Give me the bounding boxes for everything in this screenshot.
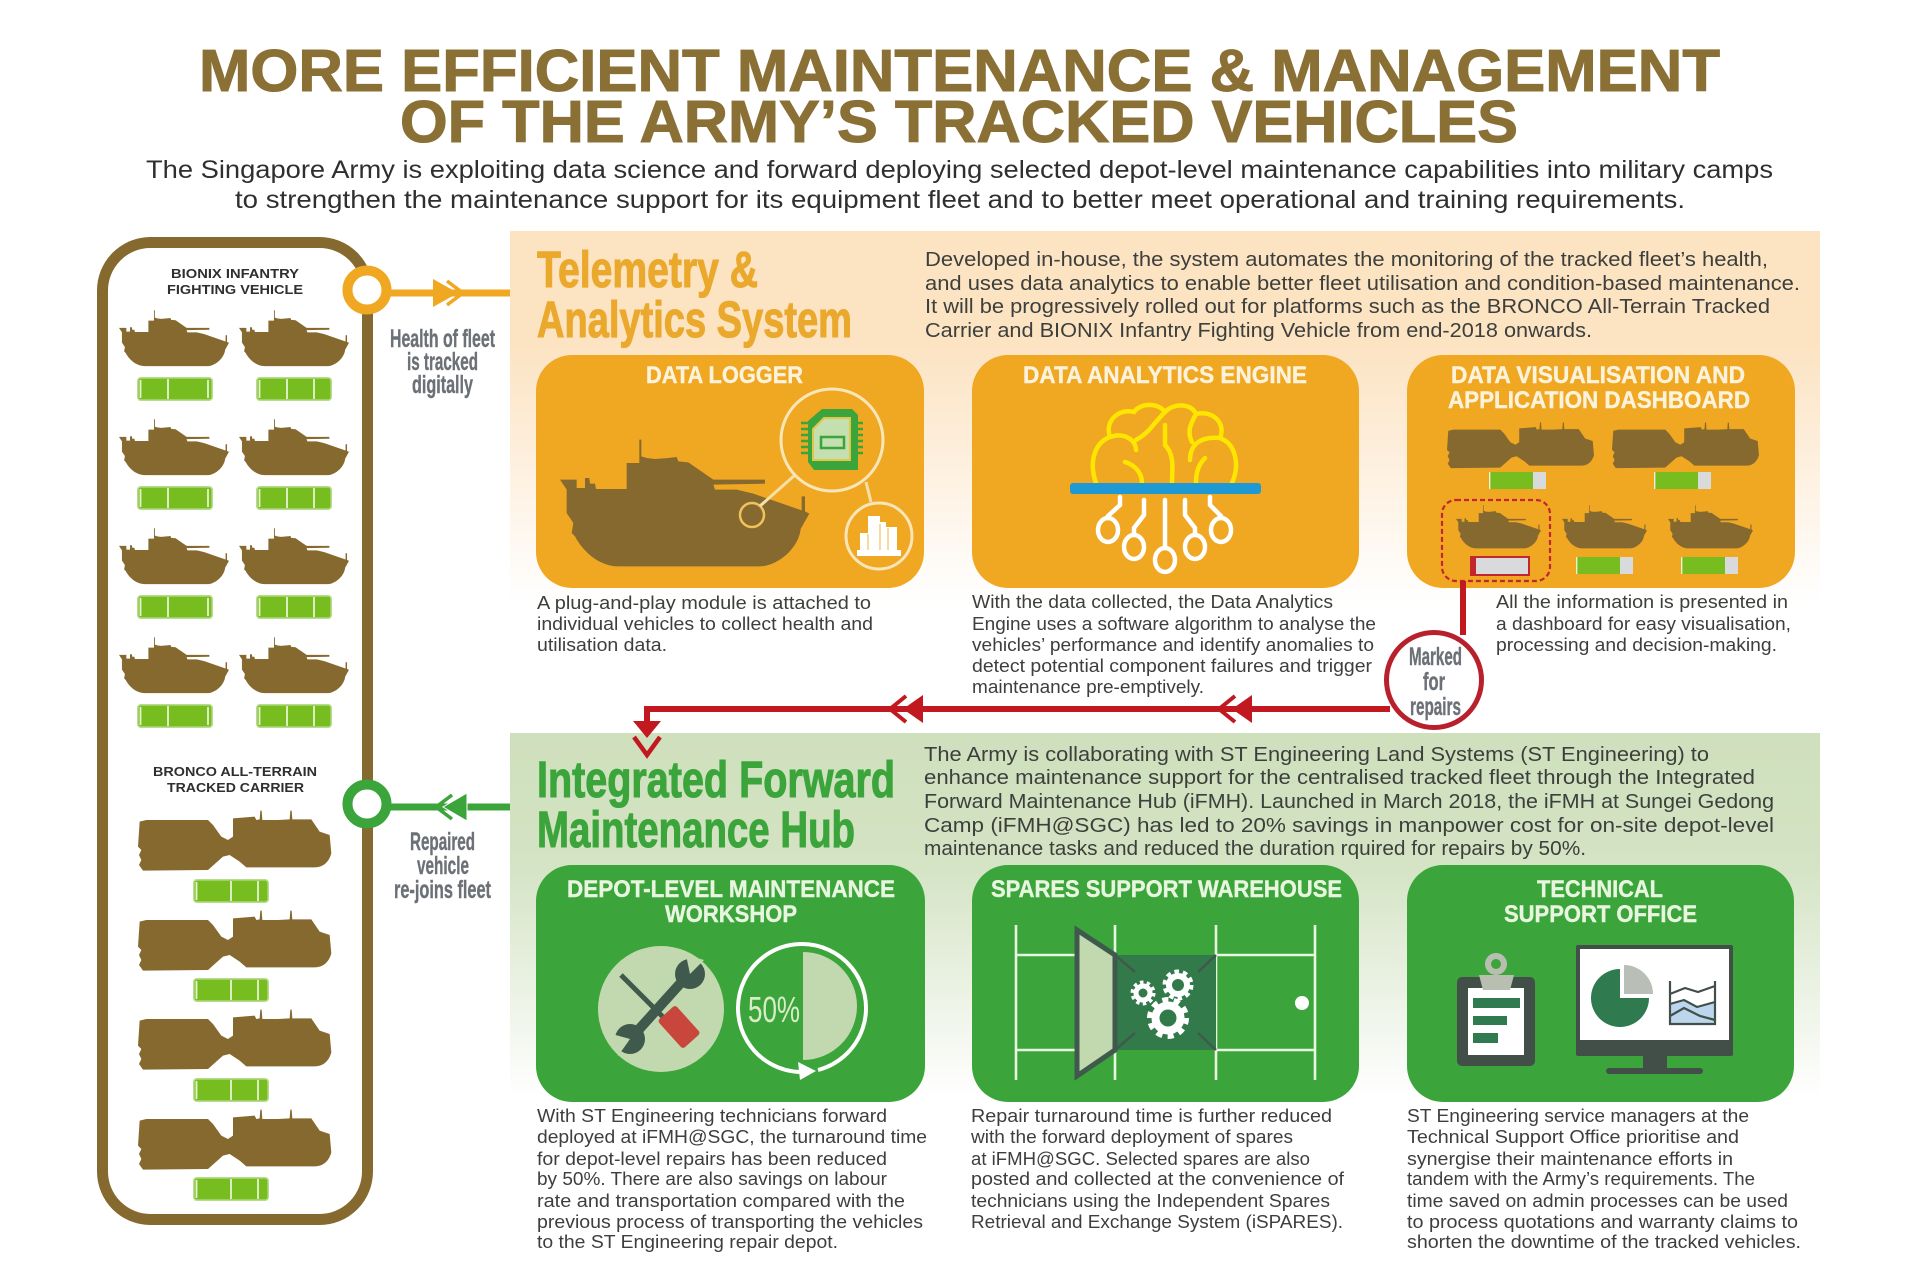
caption: technical support office: Technical Support Office prioritise and — [1407, 1127, 1739, 1147]
caption: workshop: to the ST Engineering repair depot. — [537, 1232, 838, 1252]
telemetry description: It will be progressively rolled out for platforms such as the BRONCO All-Terrain Tracked — [925, 296, 1770, 318]
panel: integrated forward maintenance hub — [510, 733, 1820, 1102]
card: spares support warehouse: SPARES SUPPORT WAREHOUSE — [991, 876, 1342, 903]
caption: data analytics engine: vehicles’ performance and identify anomalies to — [972, 635, 1374, 655]
vehicle: bionix 8 — [239, 637, 349, 727]
heading: integrated forward maintenance hub — [537, 751, 895, 858]
vehicle: bronco 3 — [138, 1010, 331, 1101]
heading: telemetry: Analytics System — [537, 291, 852, 348]
vehicle: bronco 1 — [138, 811, 331, 902]
title: MORE EFFICIENT MAINTENANCE & MANAGEMENT — [199, 38, 1720, 104]
label: bronco — [153, 764, 317, 795]
callout: marked for repairs — [1386, 632, 1482, 728]
card: technical support office — [1407, 865, 1794, 1102]
hub description: maintenance tasks and reduced the duration rquired for repairs by 50%. — [924, 838, 1586, 860]
caption: warehouse: with the forward deployment of spares — [970, 1127, 1293, 1147]
label: bionix: FIGHTING VEHICLE — [167, 282, 303, 297]
icon: dashboard vehicle 2 — [1612, 423, 1759, 489]
hub description: enhance maintenance support for the centralised tracked fleet through the Integrated — [924, 767, 1755, 789]
caption: data analytics engine: With the data collected, the Data Analytics — [972, 592, 1333, 612]
caption: technical support office: to process quotations and warranty claims to — [1407, 1212, 1798, 1232]
title: OF THE ARMY’S TRACKED VEHICLES — [400, 89, 1518, 155]
heading: integrated forward maintenance hub: Integrated Forward — [537, 751, 895, 808]
hub description — [924, 744, 1774, 860]
card: data visualisation and application dashboard: APPLICATION DASHBOARD — [1448, 387, 1750, 414]
arrow: repaired vehicle returns — [348, 784, 510, 824]
icon: clipboard — [1457, 956, 1535, 1066]
caption: technical support office: shorten the downtime of the tracked vehicles. — [1407, 1232, 1801, 1252]
hub description: Forward Maintenance Hub (iFMH). Launched in March 2018, the iFMH at Sungei Gedong — [924, 791, 1774, 813]
caption: technical support office: ST Engineering service managers at the — [1407, 1106, 1749, 1126]
icon: 50 percent turnaround dial — [738, 944, 866, 1080]
caption: technical support office: time saved on admin processes can be used — [1407, 1191, 1788, 1211]
caption: workshop: deployed at iFMH@SGC, the turnaround time — [537, 1127, 927, 1147]
caption: data logger: individual vehicles to collect health and — [537, 614, 873, 634]
note: health tracked: is tracked — [407, 348, 478, 376]
caption: warehouse: technicians using the Independent Spares — [971, 1191, 1330, 1211]
icon: wrench and screwdriver — [598, 946, 724, 1072]
label: bionix: BIONIX INFANTRY — [171, 266, 299, 281]
heading: telemetry: Telemetry & — [537, 241, 758, 298]
telemetry description: Carrier and BIONIX Infantry Fighting Vehicle from end-2018 onwards. — [925, 320, 1592, 342]
vehicle: bronco 4 — [138, 1110, 331, 1200]
caption: workshop: With ST Engineering technicians forward — [537, 1106, 887, 1126]
caption: data analytics engine — [972, 592, 1376, 697]
intro text: to strengthen the maintenance support for its equipment fleet and to better meet operational and training requirements. — [235, 186, 1685, 214]
card: data analytics engine: DATA ANALYTICS ENGINE — [1023, 362, 1307, 389]
icon: warehouse with gears — [1016, 925, 1315, 1080]
card: technical support office: TECHNICAL — [1537, 876, 1663, 903]
label: bronco: BRONCO ALL-TERRAIN — [153, 764, 317, 779]
vehicle: bionix 3 — [119, 419, 229, 509]
caption: warehouse — [970, 1106, 1345, 1232]
panel: vehicle fleet — [102, 242, 368, 1220]
card: spares support warehouse — [972, 865, 1359, 1102]
card: data logger: DATA LOGGER — [646, 362, 803, 389]
caption: dashboard — [1496, 592, 1791, 655]
callout: marked for repairs: for — [1423, 668, 1445, 696]
icon: chip in circle — [781, 389, 883, 491]
title — [199, 38, 1720, 155]
intro text — [146, 156, 1773, 214]
vehicle: bionix 7 — [119, 637, 229, 727]
caption: dashboard: All the information is presented in — [1496, 592, 1788, 612]
caption: data analytics engine: detect potential component failures and trigger — [972, 656, 1372, 676]
note: repaired vehicle: vehicle — [417, 852, 469, 880]
telemetry description: and uses data analytics to enable better fleet utilisation and condition-based maintenance. — [925, 273, 1800, 295]
caption: workshop — [537, 1106, 927, 1252]
icon: monitor with charts — [1576, 945, 1733, 1074]
icon: dashboard vehicle flagged for repair — [1442, 500, 1550, 581]
note: health tracked — [390, 325, 495, 399]
label: bionix — [167, 266, 303, 297]
icon: tank with sensor — [560, 440, 871, 566]
caption: data logger — [537, 593, 873, 655]
heading: integrated forward maintenance hub: Maintenance Hub — [537, 801, 855, 858]
arrow: marked for repairs to hub — [633, 581, 1463, 755]
vehicle: bionix 4 — [239, 419, 349, 509]
icon: bar chart in circle — [846, 503, 912, 569]
vehicle: bionix 1 — [119, 310, 229, 400]
caption: technical support office: synergise their maintenance efforts in — [1407, 1149, 1733, 1169]
intro text: The Singapore Army is exploiting data science and forward deploying selected depot-level maintenance capabilities into military camps — [146, 156, 1773, 184]
caption: technical support office: tandem with the Army’s requirements. The — [1407, 1169, 1755, 1189]
icon: dashboard vehicle 4 — [1562, 505, 1647, 574]
icon: brain — [1070, 405, 1261, 572]
note: health tracked: Health of fleet — [390, 325, 495, 353]
callout: marked for repairs: repairs — [1410, 693, 1461, 721]
icon: dashboard vehicle 5 — [1668, 505, 1753, 574]
caption: data logger: A plug-and-play module is attached to — [537, 593, 871, 613]
arrow: fleet health to telemetry — [348, 270, 510, 310]
note: health tracked: digitally — [412, 371, 473, 399]
vehicle: bionix 5 — [119, 528, 229, 618]
caption: warehouse: Retrieval and Exchange System (iSPARES). — [971, 1212, 1343, 1232]
telemetry description: Developed in-house, the system automates the monitoring of the tracked fleet’s health, — [925, 249, 1768, 271]
caption: workshop: previous process of transporting the vehicles — [537, 1212, 923, 1232]
panel: telemetry and analytics system — [510, 231, 1820, 603]
card: technical support office: SUPPORT OFFICE — [1504, 901, 1697, 928]
callout: marked for repairs: Marked — [1409, 643, 1462, 671]
heading: telemetry — [537, 241, 852, 348]
icon: dashboard vehicle 1 — [1447, 423, 1594, 489]
label: bronco: TRACKED CARRIER — [167, 780, 305, 795]
card: data visualisation and application dashboard — [1407, 355, 1795, 588]
hub description: The Army is collaborating with ST Engineering Land Systems (ST Engineering) to — [924, 744, 1709, 766]
card: data analytics engine — [972, 355, 1359, 588]
caption: dashboard: a dashboard for easy visualisation, — [1496, 614, 1791, 634]
caption: workshop: by 50%. There are also savings on labour — [537, 1169, 887, 1189]
caption: data analytics engine: maintenance pre-emptively. — [972, 677, 1204, 697]
card: data visualisation and application dashboard: DATA VISUALISATION AND — [1451, 362, 1745, 389]
caption: warehouse: posted and collected at the convenience of — [971, 1169, 1345, 1189]
telemetry description — [925, 249, 1800, 342]
note: repaired vehicle — [394, 828, 491, 904]
caption: technical support office — [1407, 1106, 1801, 1252]
caption: data logger: utilisation data. — [537, 635, 667, 655]
card: data logger — [536, 355, 924, 588]
vehicle: bionix 6 — [239, 528, 349, 618]
caption: workshop: for depot-level repairs has been reduced — [537, 1149, 887, 1169]
note: repaired vehicle: re-joins fleet — [394, 876, 491, 904]
card: depot-level maintenance workshop — [536, 865, 925, 1102]
vehicle: bionix 2 — [239, 310, 349, 400]
note: repaired vehicle: Repaired — [410, 828, 475, 856]
caption: workshop: rate and transportation compared with the — [537, 1191, 905, 1211]
caption: warehouse: at iFMH@SGC. Selected spares are also — [971, 1149, 1310, 1169]
caption: data analytics engine: Engine uses a software algorithm to analyse the — [972, 614, 1376, 634]
hub description: Camp (iFMH@SGC) has led to 20% savings in manpower cost for on-site depot-level — [924, 815, 1774, 837]
vehicle: bronco 2 — [138, 911, 331, 1001]
card: depot-level maintenance workshop: WORKSHOP — [665, 901, 797, 928]
icon: 50 percent turnaround dial: 50% — [748, 989, 800, 1030]
caption: dashboard: processing and decision-making. — [1496, 635, 1777, 655]
card: depot-level maintenance workshop: DEPOT-LEVEL MAINTENANCE — [567, 876, 895, 903]
caption: warehouse: Repair turnaround time is further reduced — [971, 1106, 1332, 1126]
